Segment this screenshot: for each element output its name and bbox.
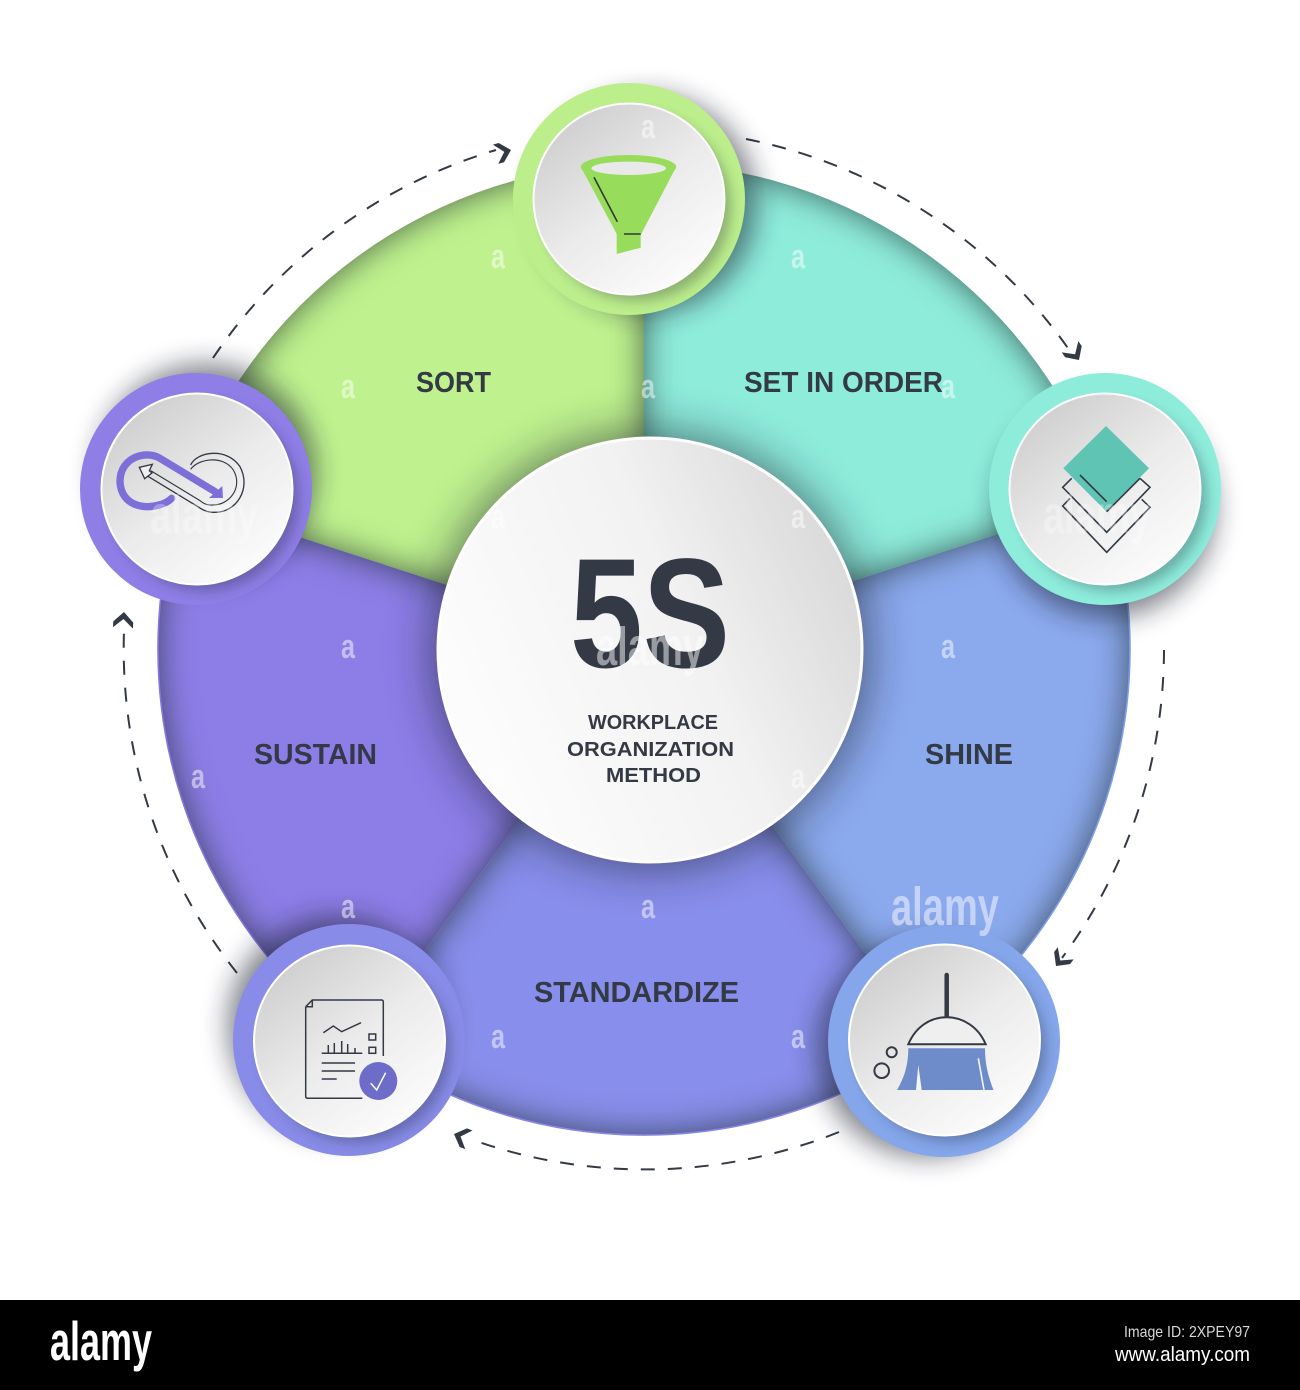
- node: set in order: [989, 373, 1221, 605]
- footer logo: alamy: [50, 1310, 152, 1372]
- icon: broom: [874, 975, 994, 1090]
- watermarks: a: [941, 628, 956, 666]
- center subtitle: ORGANIZATION: [567, 738, 734, 761]
- center circle shadow: [430, 430, 870, 870]
- watermarks: a: [491, 758, 506, 796]
- node: sustain: [80, 373, 312, 605]
- watermarks: a: [341, 628, 356, 666]
- segment: sort: [182, 163, 644, 649]
- watermarks: a: [791, 758, 806, 796]
- watermarks: alamy: [150, 485, 258, 545]
- ring shadows: [96, 94, 1216, 1158]
- label: standardize: STANDARDIZE: [534, 977, 739, 1009]
- watermarks: a: [641, 888, 656, 926]
- watermarks: a: [341, 368, 356, 406]
- footer image id: Image ID: 2XPEY97: [1124, 1324, 1250, 1341]
- center title 5S: 5S: [570, 527, 730, 701]
- node: standardize: [233, 924, 465, 1156]
- segment rim highlights: [158, 499, 1130, 1135]
- segment: shine: [644, 499, 1130, 1042]
- segment: standardize: [358, 649, 930, 1135]
- segment: sustain: [158, 499, 644, 1042]
- watermarks: a: [791, 498, 806, 536]
- footer bar: [0, 1300, 1300, 1390]
- center subtitle: [567, 711, 734, 787]
- center subtitle: WORKPLACE: [588, 711, 718, 734]
- segment: set in order: [644, 163, 1106, 649]
- label: sustain: SUSTAIN: [254, 739, 377, 771]
- dashed arrow: standardize to sustain: [113, 611, 237, 973]
- label: set in order: SET IN ORDER: [744, 367, 943, 399]
- watermarks: a: [641, 368, 656, 406]
- watermarks: alamy: [1043, 485, 1151, 545]
- label: sort: SORT: [416, 367, 491, 399]
- watermarks: a: [491, 498, 506, 536]
- watermarks: a: [641, 108, 656, 146]
- watermarks: a: [941, 368, 956, 406]
- watermarks: a: [791, 238, 806, 276]
- dashed arrow: sort to set in order: [746, 139, 1087, 366]
- icon: document with check: [306, 1000, 397, 1100]
- watermarks: a: [791, 1018, 806, 1056]
- icon: funnel: [581, 155, 676, 254]
- dashed arrow: shine to standardize: [450, 1125, 839, 1169]
- watermarks: alamy: [596, 617, 704, 677]
- node: sort: [513, 83, 745, 315]
- center circle: [438, 438, 862, 862]
- watermarks: a: [491, 238, 506, 276]
- dashed arrow: set in order to shine: [1048, 650, 1164, 972]
- watermarks: a: [191, 758, 206, 796]
- node: shine: [828, 925, 1060, 1157]
- center subtitle: METHOD: [606, 764, 701, 787]
- icon: infinity loop: [120, 453, 244, 512]
- dashed arrow: sustain to sort: [213, 140, 514, 358]
- icon: layers: [1063, 426, 1150, 552]
- watermarks: alamy: [891, 877, 999, 937]
- label: shine: SHINE: [925, 739, 1013, 771]
- watermarks: a: [341, 888, 356, 926]
- watermarks: a: [491, 1018, 506, 1056]
- footer url: www.alamy.com: [1114, 1344, 1250, 1366]
- watermarks: [150, 108, 1151, 1056]
